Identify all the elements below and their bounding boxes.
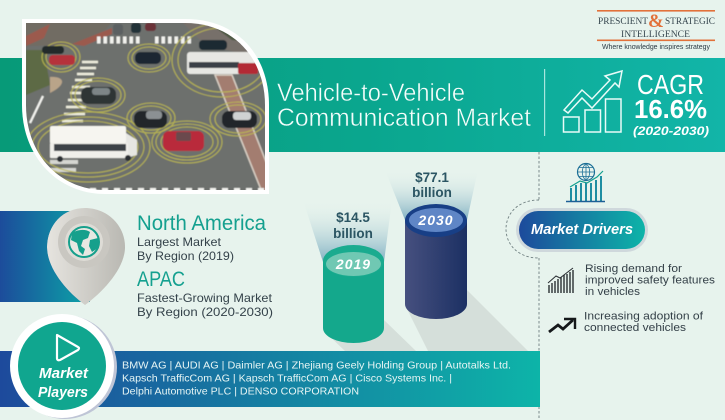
dashed connector	[506, 152, 539, 420]
icon: growth chart	[564, 71, 622, 132]
badge label: Players	[38, 384, 88, 401]
panel: regions strip	[0, 208, 125, 305]
text: APAC: APAC	[137, 268, 185, 291]
text: driver two: Increasing adoption of	[584, 310, 704, 322]
badge label: Market	[39, 365, 89, 382]
logo: &	[648, 11, 664, 32]
text: driver one: in vehicles	[585, 286, 641, 298]
text: driver one: improved safety features	[585, 274, 716, 286]
photo: connected vehicles at an intersection	[20, 18, 272, 194]
text: company list	[122, 360, 511, 398]
badge label	[38, 365, 89, 401]
bar: 2019 value: $14.5	[336, 210, 370, 225]
bar: 2019 value: 2019	[335, 256, 371, 272]
CAGR callout	[633, 69, 709, 138]
text: APAC: Fastest-Growing Market	[137, 291, 273, 305]
text: North America: North America	[137, 212, 266, 235]
crosswalks	[97, 36, 192, 44]
divider	[544, 69, 545, 136]
icon: globe over bars	[566, 164, 605, 202]
logo: STRATEGIC	[665, 16, 715, 27]
text: driver one	[585, 263, 716, 298]
icon: play	[57, 335, 79, 360]
transit bus	[187, 52, 255, 74]
bar: 2019 value: billion	[333, 226, 373, 241]
logo	[597, 10, 715, 51]
panel: market players strip	[0, 351, 540, 407]
bar: 2019 value	[303, 200, 392, 343]
market players badge	[10, 314, 117, 419]
logo: INTELLIGENCE	[621, 29, 690, 40]
bar: 2030 value: 2030	[417, 212, 454, 228]
text: company list: Delphi Automotive PLC | DENSO CORPORATION	[122, 386, 359, 398]
text: North America: Largest Market	[137, 235, 222, 249]
title: Vehicle-to-Vehicle	[277, 79, 465, 107]
white bus	[50, 126, 126, 144]
icon: map pin with globe	[0, 208, 125, 305]
text: North America	[137, 212, 266, 263]
text: North America: By Region (2019)	[137, 249, 234, 263]
teal title band	[0, 58, 725, 152]
logo: Where knowledge inspires strategy	[602, 42, 710, 51]
text: company list: BMW AG | AUDI AG | Daimler AG | Zhejiang Geely Holding Group | Autotalks Ltd.	[122, 360, 511, 372]
bar shadows	[323, 290, 528, 351]
icon: trend arrow	[549, 319, 575, 332]
market drivers pill	[516, 208, 648, 252]
text: company list: Kapsch TrafficCom AG | Kapsch TrafficCom AG | Cisco Systems Inc. |	[122, 372, 452, 384]
title	[277, 79, 531, 132]
logo: PRESCIENT	[598, 16, 648, 27]
icon: rising bars	[548, 268, 573, 293]
bar: 2030 value	[385, 170, 478, 319]
CAGR callout: CAGR	[637, 69, 704, 100]
bar: 2030 value: $77.1	[415, 170, 449, 185]
text: driver one: Rising demand for	[585, 263, 682, 275]
text: APAC: By Region (2020-2030)	[137, 305, 273, 319]
CAGR callout: 16.6%	[634, 94, 707, 124]
text: driver two: connected vehicles	[584, 322, 687, 334]
market drivers pill: Market Drivers	[531, 222, 633, 238]
text: APAC	[137, 268, 273, 319]
text: driver two	[584, 310, 704, 334]
cars	[42, 46, 64, 54]
title: Communication Market	[277, 104, 531, 132]
signal rings	[26, 23, 272, 182]
CAGR callout: (2020-2030)	[633, 124, 709, 138]
bar: 2030 value: billion	[412, 185, 452, 200]
